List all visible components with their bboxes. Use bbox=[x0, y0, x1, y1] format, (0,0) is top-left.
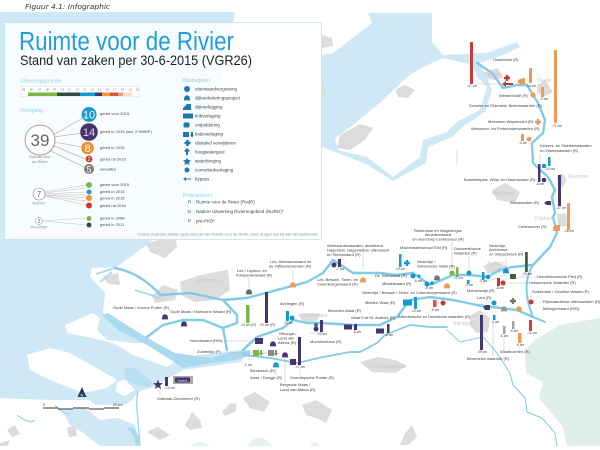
map city names: Arnhem bbox=[487, 261, 505, 267]
bar value labels: -39 cm bbox=[477, 350, 487, 354]
programmes legend: Ruimte voor de Rivier (RvdR) bbox=[196, 200, 255, 204]
circle: NURG bbox=[32, 188, 46, 206]
map labels: western rivers: Beneden-Waal (R) bbox=[328, 308, 362, 313]
bar value labels: -3 cm bbox=[491, 320, 499, 324]
land: Belgium tints bbox=[190, 438, 320, 446]
bar value labels: -6 cm bbox=[385, 333, 393, 337]
circle: pre-PKB: 2 bbox=[38, 219, 41, 225]
bar value labels: -6 cm bbox=[500, 334, 508, 338]
map labels: Nederrijn and Waal: Afferdensche en Deestsche waarden (R) bbox=[398, 314, 471, 319]
map labels: IJssel: Bolwerksplas, Wörp en Ossenwaard (R) bbox=[464, 177, 536, 182]
circle: pre-PKB bbox=[30, 218, 48, 230]
map labels: IJssel: IJsseldelta (R) bbox=[493, 57, 519, 62]
map labels: western rivers: Oude Maas / Hoeksche Waard (R) bbox=[170, 309, 232, 314]
programmes legend: Nadere Uitwerking Rivierengebied (NURG)* bbox=[196, 209, 284, 214]
bar value labels: -7 cm bbox=[336, 267, 344, 271]
bar value labels: -20 cm (R) bbox=[259, 323, 275, 327]
programmes legend: N bbox=[188, 209, 191, 214]
bar value labels: -17 cm bbox=[295, 365, 305, 369]
bar value labels: -10 cm bbox=[545, 167, 555, 171]
map labels: western rivers: Lek, Alblasserwaard en bbox=[270, 259, 311, 264]
bar value labels: -3 cm bbox=[479, 279, 487, 283]
circle: pre-PKB: Pre-PKB* bbox=[30, 224, 48, 230]
map labels: western rivers: Oude Maas / Voorne Putten (R) bbox=[113, 305, 170, 310]
map labels: western rivers: Amer / Dongje (R) bbox=[250, 375, 283, 380]
bar value labels: -8 cm bbox=[496, 286, 504, 290]
measure icons on map bbox=[153, 75, 560, 389]
status: gered na 2016 bbox=[86, 156, 127, 163]
map labels: Nederrijn and Waal: Waarden (R) bbox=[454, 250, 477, 256]
bar value labels: -8 cm bbox=[353, 330, 361, 334]
status: gered in 2016: gered in 2016 bbox=[100, 145, 125, 150]
measures legend: waterberging bbox=[195, 158, 222, 164]
heading: programma's: Programma's bbox=[183, 193, 213, 199]
map labels: IJssel: Keizers- en Stobbenwaarden bbox=[540, 143, 592, 148]
map labels: western rivers: Avelingen (R) bbox=[280, 301, 305, 306]
bar value labels: -19 cm bbox=[522, 272, 532, 276]
bar value labels: -5 cm bbox=[414, 279, 422, 283]
map labels: Nederrijn and Waal: Meinerswijk (R) bbox=[467, 288, 495, 293]
programmes legend: R bbox=[188, 200, 192, 204]
bar value labels: -12 cm bbox=[453, 276, 463, 280]
land: Germany bbox=[525, 318, 600, 446]
delta harbours bbox=[96, 268, 160, 298]
map city names: Nijmegen bbox=[453, 321, 474, 327]
map city names: Zwolle bbox=[537, 78, 552, 84]
map labels: western rivers: Krimpenerwaard (R) bbox=[236, 272, 273, 278]
map labels: Nederrijn and Waal: De Tollewaard (R) bbox=[375, 273, 408, 278]
map labels: western rivers: de Vijfheerenlanden (R) bbox=[269, 264, 312, 268]
circle: 39 Ruimte voor de Rivier bbox=[25, 125, 55, 164]
timeline: 06 bbox=[30, 88, 33, 92]
map labels: Nederrijn and Waal: Nederrijn / Betuwe / Tieler- en Culemborgerwaard (R) bbox=[362, 290, 457, 295]
map labels: Nederrijn and Waal: Doorwerthsche bbox=[454, 246, 482, 251]
measures legend: kadeverlaging bbox=[195, 132, 224, 136]
map labels: Nederrijn and Waal: en veerstoep Lexkesveer (R) bbox=[412, 236, 464, 242]
bar value labels: -3 cm bbox=[465, 283, 473, 287]
map labels: Nederrijn and Waal: Nederrijn, bbox=[489, 243, 506, 248]
map labels: western rivers: Biesbosch (R) bbox=[250, 368, 276, 373]
bypass box: bypass bbox=[178, 378, 188, 382]
panel background bbox=[4, 22, 322, 240]
status: gered in 2016: 8 bbox=[84, 143, 91, 155]
bar value labels: -9 cm bbox=[425, 286, 433, 290]
status: gered voor 2015: gered voor 2015 bbox=[100, 111, 130, 116]
status: gered in 2015: gered in 2015 (incl. 2 HWBP) bbox=[100, 129, 152, 134]
status: gered voor 2015: 10 bbox=[83, 110, 95, 122]
heading: maatregelen: Maatregelen bbox=[182, 78, 210, 84]
map labels: Nederrijn and Waal: en Velpsebroek (R) bbox=[489, 252, 524, 256]
measures legend bbox=[183, 86, 241, 182]
map labels: IJssel: Westenholte (R) bbox=[499, 93, 528, 98]
land: Tholen east bbox=[116, 380, 135, 396]
heading: uitvoeringsperiode: Uitvoeringsperiode bbox=[20, 78, 62, 84]
rivers bbox=[115, 63, 557, 446]
bar value labels: -19 cm bbox=[395, 267, 405, 271]
map labels: IJssel: Welsumer- en Fortmonderwaarden (R) bbox=[471, 126, 540, 131]
bar value labels: -10 cm bbox=[165, 386, 175, 390]
map labels: Nederrijn and Waal: Rijnwaardense uiterwaarden (R) bbox=[543, 299, 600, 304]
figure caption: Figuur 4.1: Infographic bbox=[25, 3, 110, 11]
map labels: Nederrijn and Waal: Renkumse en Wageningse bbox=[414, 228, 463, 233]
heading: voortgang: Voortgang bbox=[20, 108, 43, 114]
bar value labels: -37 cm bbox=[556, 206, 566, 210]
bar value labels: -14 cm bbox=[526, 84, 536, 88]
map city names: Kampen bbox=[483, 72, 502, 78]
circle: 39 Ruimte voor de Rivier: Ruimte voor bbox=[29, 154, 51, 159]
measures legend: dijkverlegging bbox=[195, 104, 223, 110]
map city names: Gorinchem bbox=[303, 313, 327, 319]
circle: NURG: NURG* bbox=[32, 200, 46, 206]
water: North Sea and delta bbox=[0, 12, 250, 405]
map labels: Nederrijn and Waal: Waalbochten (R) bbox=[500, 349, 531, 354]
measures legend: ontpoldering bbox=[195, 122, 220, 128]
map leader lines bbox=[160, 84, 540, 396]
NURG statuses: gered na 2016 bbox=[100, 203, 127, 208]
map labels: western rivers: Altena (R) bbox=[278, 340, 297, 345]
status: vervallen: vervallen bbox=[100, 166, 116, 172]
map labels: western rivers: Culemborgerwaard (R) bbox=[317, 282, 358, 286]
map labels: Nederrijn and Waal bbox=[362, 228, 600, 361]
map labels: IJssel: en Olsterwaarden (R) bbox=[540, 148, 579, 153]
pre-PKB statuses bbox=[86, 216, 125, 228]
map labels: western rivers: Bergsche Maas / bbox=[280, 382, 311, 387]
bar value labels: -10 cm bbox=[411, 309, 421, 313]
map labels: Nederrijn and Waal: Arnhemse- bbox=[489, 247, 509, 252]
water: canal south bbox=[17, 390, 140, 446]
programmes legend: P bbox=[188, 218, 191, 224]
timeline: 09 bbox=[53, 88, 56, 92]
scale bar bbox=[43, 403, 123, 409]
bar value labels: -9 cm bbox=[516, 343, 524, 347]
programmes legend: pre-PKB* bbox=[196, 218, 215, 224]
measures legend: obstakel verwijderen bbox=[195, 140, 237, 146]
map labels: Nederrijn and Waal: Huissensche Waarden (R) bbox=[529, 280, 576, 285]
bar value labels: -13 cm (R) bbox=[240, 323, 256, 327]
status: gered in 2015 bbox=[80, 123, 152, 141]
bar value labels: -6 cm bbox=[510, 329, 518, 333]
circle: 39 Ruimte voor de Rivier: 39 bbox=[31, 131, 49, 150]
timeline: 13 bbox=[83, 88, 86, 92]
timeline: 10 bbox=[61, 88, 64, 92]
map labels: IJssel: Woodsanten (R) bbox=[510, 200, 540, 205]
measures legend: zomerbedverlaging bbox=[195, 168, 234, 172]
pre-PKB statuses: gered in 2011 bbox=[100, 222, 125, 227]
water: Volkerak bbox=[125, 367, 153, 387]
map labels: western rivers bbox=[113, 243, 396, 401]
map labels: western rivers: Overdiepsche Polder (R) bbox=[290, 375, 335, 380]
bypass box bbox=[173, 376, 193, 384]
NURG statuses: gered voor 2015 bbox=[100, 182, 130, 187]
timeline: 19 bbox=[129, 88, 132, 92]
circle: 39 Ruimte voor de Rivier: de Rivier bbox=[32, 159, 49, 164]
footnote: *) Deze projecten maken geen deel uit van Ruimte voor de Rivier, maar dragen wel bij aan het doelbereik. bbox=[137, 232, 318, 236]
bars: water level reductions bbox=[165, 42, 570, 386]
map labels: Nederrijn and Waal: Lent (R) bbox=[477, 295, 492, 300]
bar value labels: -11 cm bbox=[527, 331, 537, 335]
subtitle: Stand van zaken per 30-6-2015 (VGR26) bbox=[20, 52, 252, 68]
bar value labels: -8 cm bbox=[536, 182, 544, 186]
map labels: western rivers: Noordwaard (R/N) bbox=[190, 338, 223, 343]
map labels: Nederrijn and Waal: Middelwaard (R) bbox=[382, 281, 412, 286]
map labels: Nederrijn and Waal: Machinistenschool Elst (R) bbox=[400, 245, 448, 250]
status: gered voor 2015 bbox=[82, 107, 130, 122]
bar value labels: -16 cm bbox=[564, 229, 574, 233]
map labels: Nederrijn and Waal: Hondsbroeksche Pleij (R) bbox=[537, 274, 583, 279]
status: gered na 2016: gered na 2016 bbox=[100, 156, 127, 162]
map labels: western rivers: en Steenwaard (R) bbox=[327, 252, 361, 257]
bar value labels: -9 cm bbox=[540, 97, 548, 101]
map labels: western rivers: Werkwardewaarden, duwetland bbox=[327, 243, 383, 248]
map labels: Nederrijn and Waal: benedenwaard bbox=[425, 232, 451, 237]
status: gered na 2016: 2 bbox=[88, 157, 91, 163]
map labels: western rivers: Lek / Lopiker- en bbox=[237, 268, 267, 273]
map labels: western rivers: Zuiderklip (P) bbox=[197, 349, 221, 354]
timeline bbox=[21, 86, 139, 96]
bar value labels: -6 cm bbox=[431, 308, 439, 312]
NURG statuses bbox=[86, 182, 130, 208]
NURG statuses: gered in 2015 bbox=[100, 189, 125, 194]
title: Ruimte voor de Rivier bbox=[19, 28, 234, 56]
timeline: 08 bbox=[46, 88, 49, 92]
map labels: Nederrijn and Waal: Sulkerdam / Gendtse Waard (R) bbox=[532, 289, 590, 294]
map labels: Nederrijn and Waal: Nederrijn / bbox=[417, 259, 436, 264]
map labels: Nederrijn and Waal: Millingerwaard (R/N) bbox=[543, 306, 580, 311]
panel: legend bbox=[4, 22, 322, 240]
timeline: 07 bbox=[38, 88, 41, 92]
map labels: western rivers: Munnikenland (R) bbox=[310, 339, 342, 344]
measures legend: dijkverbeteringsproject bbox=[195, 96, 241, 100]
timeline: 18 bbox=[121, 88, 124, 92]
bar value labels: -12 cm bbox=[317, 332, 327, 336]
map labels: western rivers: Land van Altena (R) bbox=[280, 387, 316, 392]
land: Schouwen and Tholen bbox=[27, 348, 117, 393]
map labels: western rivers: Lek, Betuwe, Tieler- en bbox=[317, 277, 358, 282]
map labels: Nederrijn and Waal: Bemmelse waarden (R) bbox=[467, 356, 510, 361]
map labels: western rivers: Hagestein, Hagesteinse uiterwaard bbox=[327, 248, 389, 252]
connector lines RvdR bbox=[49, 118, 85, 167]
map labels: western rivers: Volkerak-Zoommeer (R) bbox=[157, 396, 200, 401]
map labels: western rivers: Land van bbox=[278, 336, 294, 340]
timeline: 05 bbox=[22, 88, 25, 92]
timeline: 14 bbox=[91, 88, 94, 92]
status: vervallen bbox=[84, 164, 116, 174]
map city names: Rotterdam bbox=[197, 278, 220, 284]
timeline: 17 bbox=[113, 88, 116, 92]
timeline: 16 bbox=[106, 88, 109, 92]
bar value labels: -1 cm bbox=[244, 363, 252, 367]
timeline: 15 bbox=[98, 88, 101, 92]
map labels: western rivers: Steurgat / bbox=[279, 331, 297, 336]
map city names: Apeldoorn bbox=[492, 191, 515, 197]
map labels: IJssel bbox=[464, 57, 592, 229]
connector lines pre-PKB bbox=[43, 218, 86, 225]
bar value labels bbox=[165, 84, 574, 390]
land: Flevoland bbox=[335, 58, 487, 177]
map labels: Nederrijn and Waal: Geldersche Vallei (R) bbox=[417, 264, 455, 268]
water: Oosterschelde and Westerschelde bbox=[62, 408, 140, 446]
circle: NURG: 7 bbox=[37, 190, 42, 199]
north arrow bbox=[78, 387, 86, 398]
status: vervallen: 5 bbox=[86, 164, 92, 174]
measures legend: kribverlaging bbox=[195, 114, 221, 118]
timeline: 12 bbox=[76, 88, 79, 92]
land: Goeree-Overflakkee bbox=[65, 313, 177, 367]
status: gered in 2016 bbox=[81, 142, 125, 155]
programmes legend bbox=[188, 200, 284, 224]
map labels: IJssel: Scheller en Oldeneler Buitenwaarden (R) bbox=[469, 103, 543, 108]
map city names bbox=[197, 72, 589, 370]
measures legend: hoogwatergeul bbox=[195, 150, 225, 154]
measures legend: bypass bbox=[195, 176, 210, 182]
NURG statuses: gered in 2016 bbox=[100, 196, 125, 200]
map city names: Deventer bbox=[568, 174, 589, 180]
map city names: Zutphen bbox=[534, 216, 553, 222]
measures legend: uiterwaardvergraving bbox=[195, 86, 238, 92]
map labels: IJssel: Cortenoever (R) bbox=[518, 224, 547, 229]
bar value labels: -71 cm bbox=[552, 124, 562, 128]
scale bar: 25 km bbox=[113, 403, 123, 407]
bar value labels: -47 cm bbox=[467, 84, 477, 88]
pre-PKB statuses: gered in 2008 bbox=[100, 216, 125, 220]
timeline: 11 bbox=[68, 88, 71, 92]
map labels: western rivers: Waal Fort St. Andries (R) bbox=[351, 315, 396, 320]
bar value labels: -10 cm bbox=[283, 321, 293, 325]
map labels: Nederrijn and Waal: Midden-Waal (R) bbox=[365, 300, 396, 305]
water: IJsselmeer and Markermeer bbox=[322, 13, 520, 181]
bar value labels: -3 cm bbox=[519, 141, 527, 145]
status: gered in 2015: 14 bbox=[83, 127, 95, 139]
connector lines NURG bbox=[45, 185, 86, 205]
timeline: 20 bbox=[136, 88, 139, 92]
scale bar: 0 bbox=[43, 403, 45, 407]
map labels: IJssel: Meeuwen-Wapenveld (R) bbox=[488, 119, 534, 124]
water: Haringvliet and Hollandsch Diep bbox=[102, 313, 250, 368]
water: Krammer blob bbox=[127, 427, 139, 446]
map city names: 's-Hertogenbosch bbox=[367, 364, 406, 370]
north arrow: N bbox=[81, 392, 84, 398]
